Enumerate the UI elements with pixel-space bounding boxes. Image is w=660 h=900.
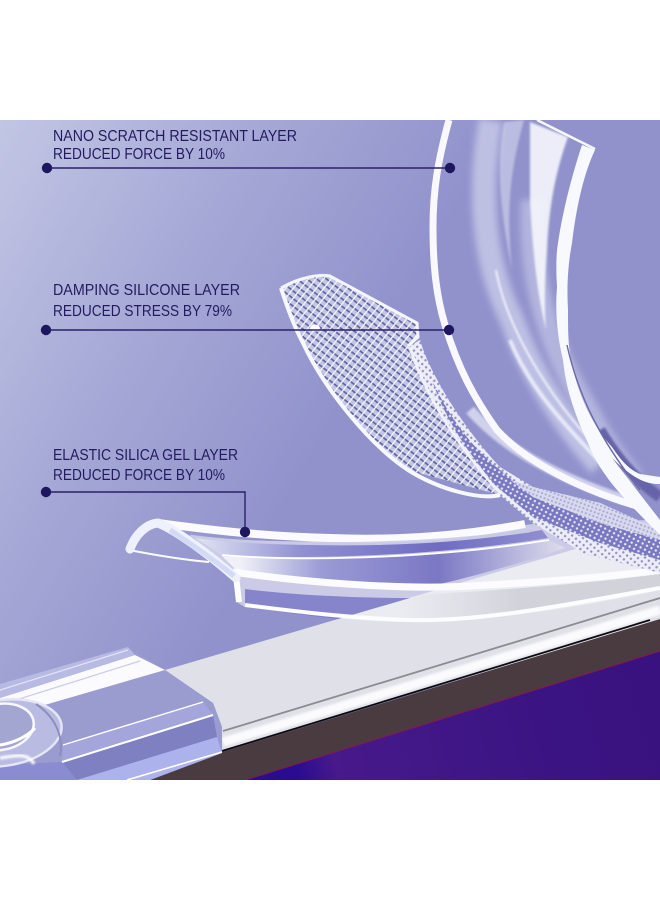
illustration: layered phone case [0, 120, 660, 780]
panel: white case body band [165, 549, 660, 752]
gray lower band [443, 574, 660, 618]
right edge white stripe [556, 145, 660, 535]
callout: nano scratch resistant layer [42, 128, 455, 173]
blue channel middle [222, 540, 565, 584]
blue channel upper [194, 530, 548, 557]
mesh white outline [281, 275, 418, 346]
highlight arcs [496, 270, 590, 440]
pale dotted fold [408, 340, 660, 573]
panel: clear case corner [0, 647, 222, 780]
blue channel lower [245, 589, 410, 619]
callout: nano scratch resistant layer: NANO SCRATCH RESISTANT LAYER [53, 128, 297, 145]
tip base line [129, 550, 209, 562]
lower white edge [245, 588, 660, 620]
flap body [190, 520, 660, 622]
layer: nano scratch resistant layer [433, 120, 660, 535]
callout: elastic silica gel layer: REDUCED FORCE BY 10% [53, 467, 225, 484]
panel: product image background [0, 120, 660, 780]
layer: damping silicone mesh [281, 275, 660, 573]
icon: camera lens ring [0, 698, 63, 768]
callout: damping silicone layer: DAMPING SILICONE LAYER [53, 282, 240, 299]
band lower shading [470, 410, 625, 500]
layer: elastic silica gel layer [129, 520, 660, 622]
panel: dark phone edge [150, 619, 660, 780]
thick white stripe [233, 570, 660, 587]
soft inner glow [484, 120, 600, 465]
curled tip [130, 523, 236, 578]
callout: damping silicone layer: REDUCED STRESS BY 79% [53, 303, 232, 320]
bright panel [530, 122, 568, 330]
callout: nano scratch resistant layer: REDUCED FORCE BY 10% [53, 146, 225, 163]
pale mesh upper [510, 480, 660, 540]
infographic canvas [0, 120, 660, 780]
blue dotted streak [432, 380, 660, 560]
panel: purple phone screen [245, 651, 660, 780]
callout: damping silicone layer [41, 282, 454, 335]
dark right streak [600, 430, 660, 497]
top lip stripe [158, 523, 525, 539]
callout: elastic silica gel layer [41, 447, 250, 537]
outer white edge [433, 120, 640, 507]
callout: elastic silica gel layer: ELASTIC SILICA GEL LAYER [53, 447, 238, 464]
